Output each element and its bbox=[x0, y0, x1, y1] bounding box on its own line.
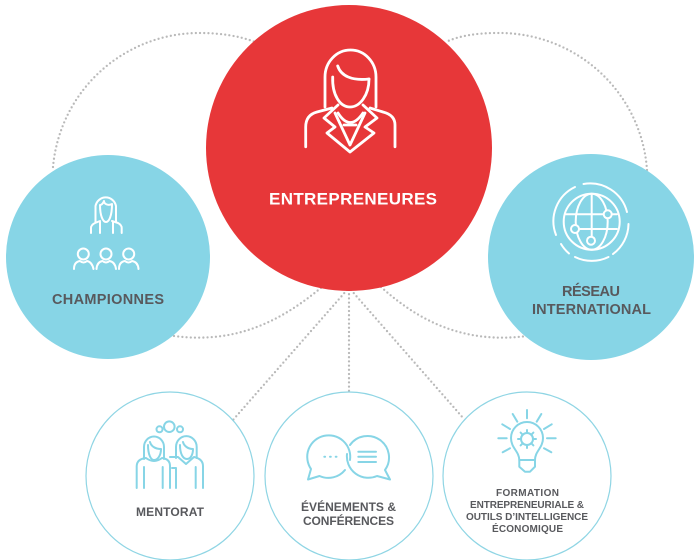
panel: championnes bbox=[6, 155, 210, 359]
icon: light bulb bbox=[498, 410, 556, 472]
panel: formation: ÉCONOMIQUE bbox=[492, 522, 563, 535]
icon: businesswoman bbox=[306, 50, 395, 152]
label: réseau international: RÉSEAU bbox=[562, 283, 620, 300]
panel: formation bbox=[443, 392, 611, 560]
icon: mentors bbox=[137, 421, 203, 488]
panel: réseau international bbox=[488, 154, 694, 360]
panel: formation: ENTREPRENEURIALE & bbox=[470, 500, 584, 511]
icon: speech bubbles bbox=[307, 435, 390, 480]
panel: mentorat bbox=[86, 392, 254, 560]
panel: événements et conférences: CONFÉRENCES bbox=[303, 513, 394, 528]
label: mentorat: MENTORAT bbox=[136, 505, 205, 519]
label: championnes: CHAMPIONNES bbox=[52, 292, 164, 308]
panel: réseau international: INTERNATIONAL bbox=[532, 302, 651, 318]
panel: événements et conférences bbox=[265, 392, 433, 560]
label: événements et conférences: ÉVÉNEMENTS & bbox=[301, 499, 396, 514]
icon: globe bbox=[553, 183, 628, 261]
label: formation: FORMATION bbox=[496, 488, 559, 499]
panel: formation: OUTILS D’INTELLIGENCE bbox=[466, 512, 588, 523]
icon: championnes group bbox=[74, 197, 138, 269]
panel: entrepreneures bbox=[206, 5, 492, 291]
heading: entrepreneures: ENTREPRENEURES bbox=[269, 190, 437, 208]
dotted connectors bbox=[53, 33, 647, 420]
